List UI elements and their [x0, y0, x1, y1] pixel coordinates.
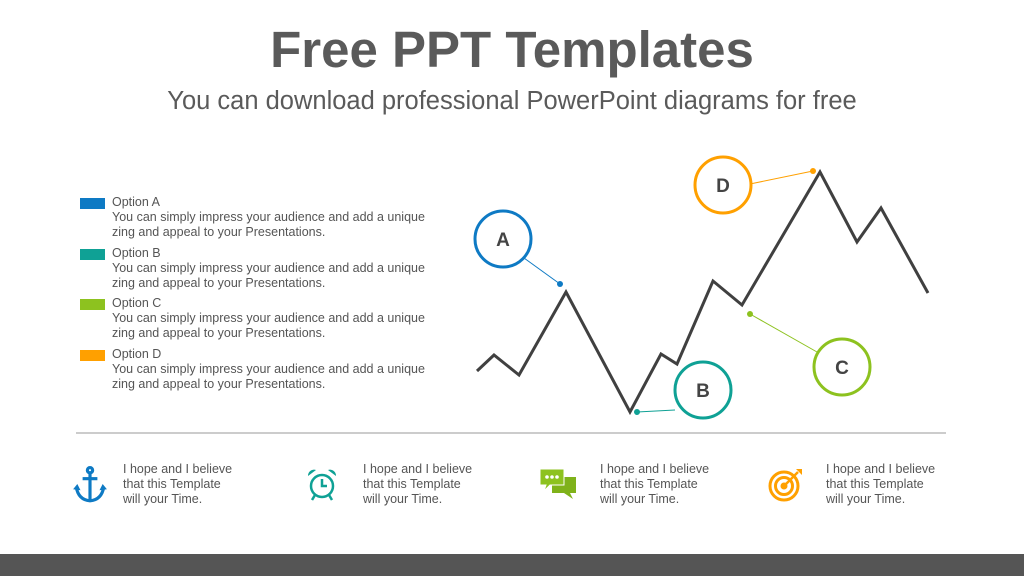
- icon: alarm clock: [308, 470, 336, 501]
- callout B: [634, 362, 731, 418]
- legend item A: Option A: [112, 195, 160, 209]
- legend item B: Option B: [112, 246, 161, 260]
- callout B: B: [696, 381, 710, 402]
- bottom item 2: that this Template: [363, 477, 461, 491]
- callout A: A: [496, 230, 510, 251]
- legend: [80, 195, 425, 391]
- bottom item 3: that this Template: [600, 477, 698, 491]
- legend item D: You can simply impress your audience and add a unique: [112, 362, 425, 376]
- legend item D: Option D: [112, 347, 161, 361]
- bottom item 1: that this Template: [123, 477, 221, 491]
- title: Free PPT Templates: [270, 21, 754, 78]
- subtitle: You can download professional PowerPoint diagrams for free: [167, 87, 857, 115]
- bottom item 4: I hope and I believe: [826, 462, 935, 476]
- legend item D: [80, 347, 425, 391]
- legend item A: zing and appeal to your Presentations.: [112, 225, 325, 239]
- zigzag line: [477, 172, 928, 412]
- bottom item 1: will your Time.: [123, 492, 202, 506]
- bottom item 4: [768, 462, 935, 506]
- bottom item 4: that this Template: [826, 477, 924, 491]
- bottom item 1: I hope and I believe: [123, 462, 232, 476]
- legend item C: [80, 296, 425, 340]
- bottom item 3: [540, 462, 709, 506]
- legend item C: Option C: [112, 296, 161, 310]
- legend item B: zing and appeal to your Presentations.: [112, 276, 325, 290]
- bottom item 2: I hope and I believe: [363, 462, 472, 476]
- icon: chat bubbles: [540, 470, 576, 499]
- legend item B: [80, 246, 425, 290]
- bottom item 2: will your Time.: [363, 492, 442, 506]
- callout C: [747, 311, 870, 395]
- callout A: [475, 211, 563, 287]
- bottom item 2: [308, 462, 472, 506]
- bottom item 3: I hope and I believe: [600, 462, 709, 476]
- callout D: [695, 157, 816, 213]
- callout C: C: [835, 358, 849, 379]
- legend item A: [80, 195, 425, 239]
- icon: anchor: [73, 466, 107, 502]
- legend item C: You can simply impress your audience and add a unique: [112, 311, 425, 325]
- bottom item 3: will your Time.: [600, 492, 679, 506]
- legend item B: You can simply impress your audience and add a unique: [112, 261, 425, 275]
- legend item D: zing and appeal to your Presentations.: [112, 377, 325, 391]
- bottom item 4: will your Time.: [826, 492, 905, 506]
- footer band: [0, 554, 1024, 576]
- legend item C: zing and appeal to your Presentations.: [112, 326, 325, 340]
- icon: target: [768, 469, 802, 502]
- bottom item 1: [73, 462, 232, 506]
- legend item A: You can simply impress your audience and add a unique: [112, 210, 425, 224]
- callout D: D: [716, 176, 730, 197]
